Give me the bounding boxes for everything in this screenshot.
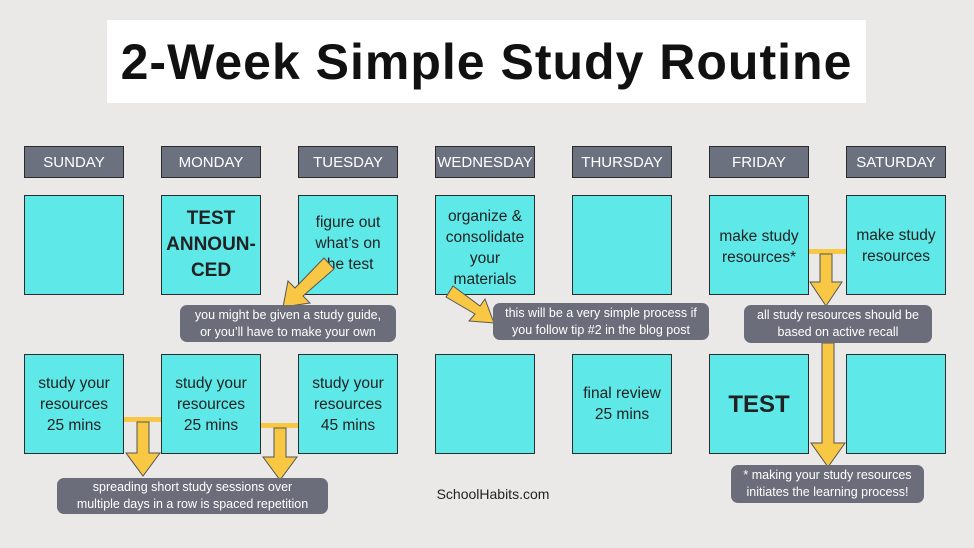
day headers: TUESDAY [313,154,383,170]
week 1 cells: CED [191,260,231,281]
callout: study guide [180,305,396,342]
week 2 cells [24,354,946,454]
callout: active recall: based on active recall [778,325,898,339]
callout: active recall [744,305,932,343]
day headers: WEDNESDAY [437,154,533,170]
arrow: wednesday [446,286,494,323]
callout: learning process: initiates the learning process! [747,485,908,499]
week 2 cells: study your [38,374,110,392]
day headers: MONDAY [179,154,243,170]
callout: active recall: all study resources should be [757,308,919,322]
title [107,20,866,103]
arrow: monday [261,423,298,480]
callout: simple process: this will be a very simple process if [505,306,697,320]
callout: simple process [493,303,709,340]
day headers: THURSDAY [581,154,663,170]
week 2 cells: resources [40,396,108,412]
day headers: SATURDAY [856,154,936,170]
arrow: tuesday [283,258,334,307]
week 1 cells: TEST [187,208,235,229]
callout: study guide: or you’ll have to make your own [200,324,376,338]
week 2 cells: final review [583,385,661,402]
week 1 cells: resources* [722,249,796,266]
callout: simple process: you follow tip #2 in the blog post [512,322,690,336]
week 1 cells: ANNOUN- [166,234,256,255]
week 1 cells: make study [719,228,799,245]
title: 2-Week Simple Study Routine [121,34,852,90]
week 2 cells: 25 mins [47,416,101,434]
week 1 cells: materials [454,271,516,288]
week 1 cells: resources [862,248,930,265]
week 2 cells: resources [314,396,382,412]
day headers: SUNDAY [43,154,105,170]
week 1 cells: make study [856,227,936,244]
callout: spaced repetition [57,478,328,514]
callout: spaced repetition: spreading short study sessions over [93,480,292,494]
week 2 cells: 45 mins [321,416,375,434]
arrow: friday short [809,249,846,306]
arrow: sunday [124,417,161,476]
week 1 cells: the test [323,256,373,273]
week 2 cells: 25 mins [595,406,649,423]
week 1 cells [24,195,946,295]
footer: SchoolHabits.com [437,486,549,502]
callout: learning process: * making your study resources [743,468,912,482]
callout: study guide: you might be given a study guide, [195,308,381,322]
week 1 cells: your [470,250,500,267]
week 2 cells: study your [175,374,247,392]
day headers: FRIDAY [732,154,786,170]
callout: spaced repetition: multiple days in a row is spaced repetition [77,497,308,511]
arrow: friday long [811,343,845,467]
week 1 cells: figure out [316,214,380,231]
week 2 cells: study your [312,374,384,392]
day headers [24,146,946,178]
week 1 cells: what’s on [315,235,381,252]
week 2 cells: TEST [728,390,790,418]
week 1 cells: organize & [448,208,522,225]
callout: learning process [731,465,924,503]
week 1 cells: consolidate [446,229,524,246]
week 2 cells: resources [177,396,245,412]
week 2 cells: 25 mins [184,416,238,434]
